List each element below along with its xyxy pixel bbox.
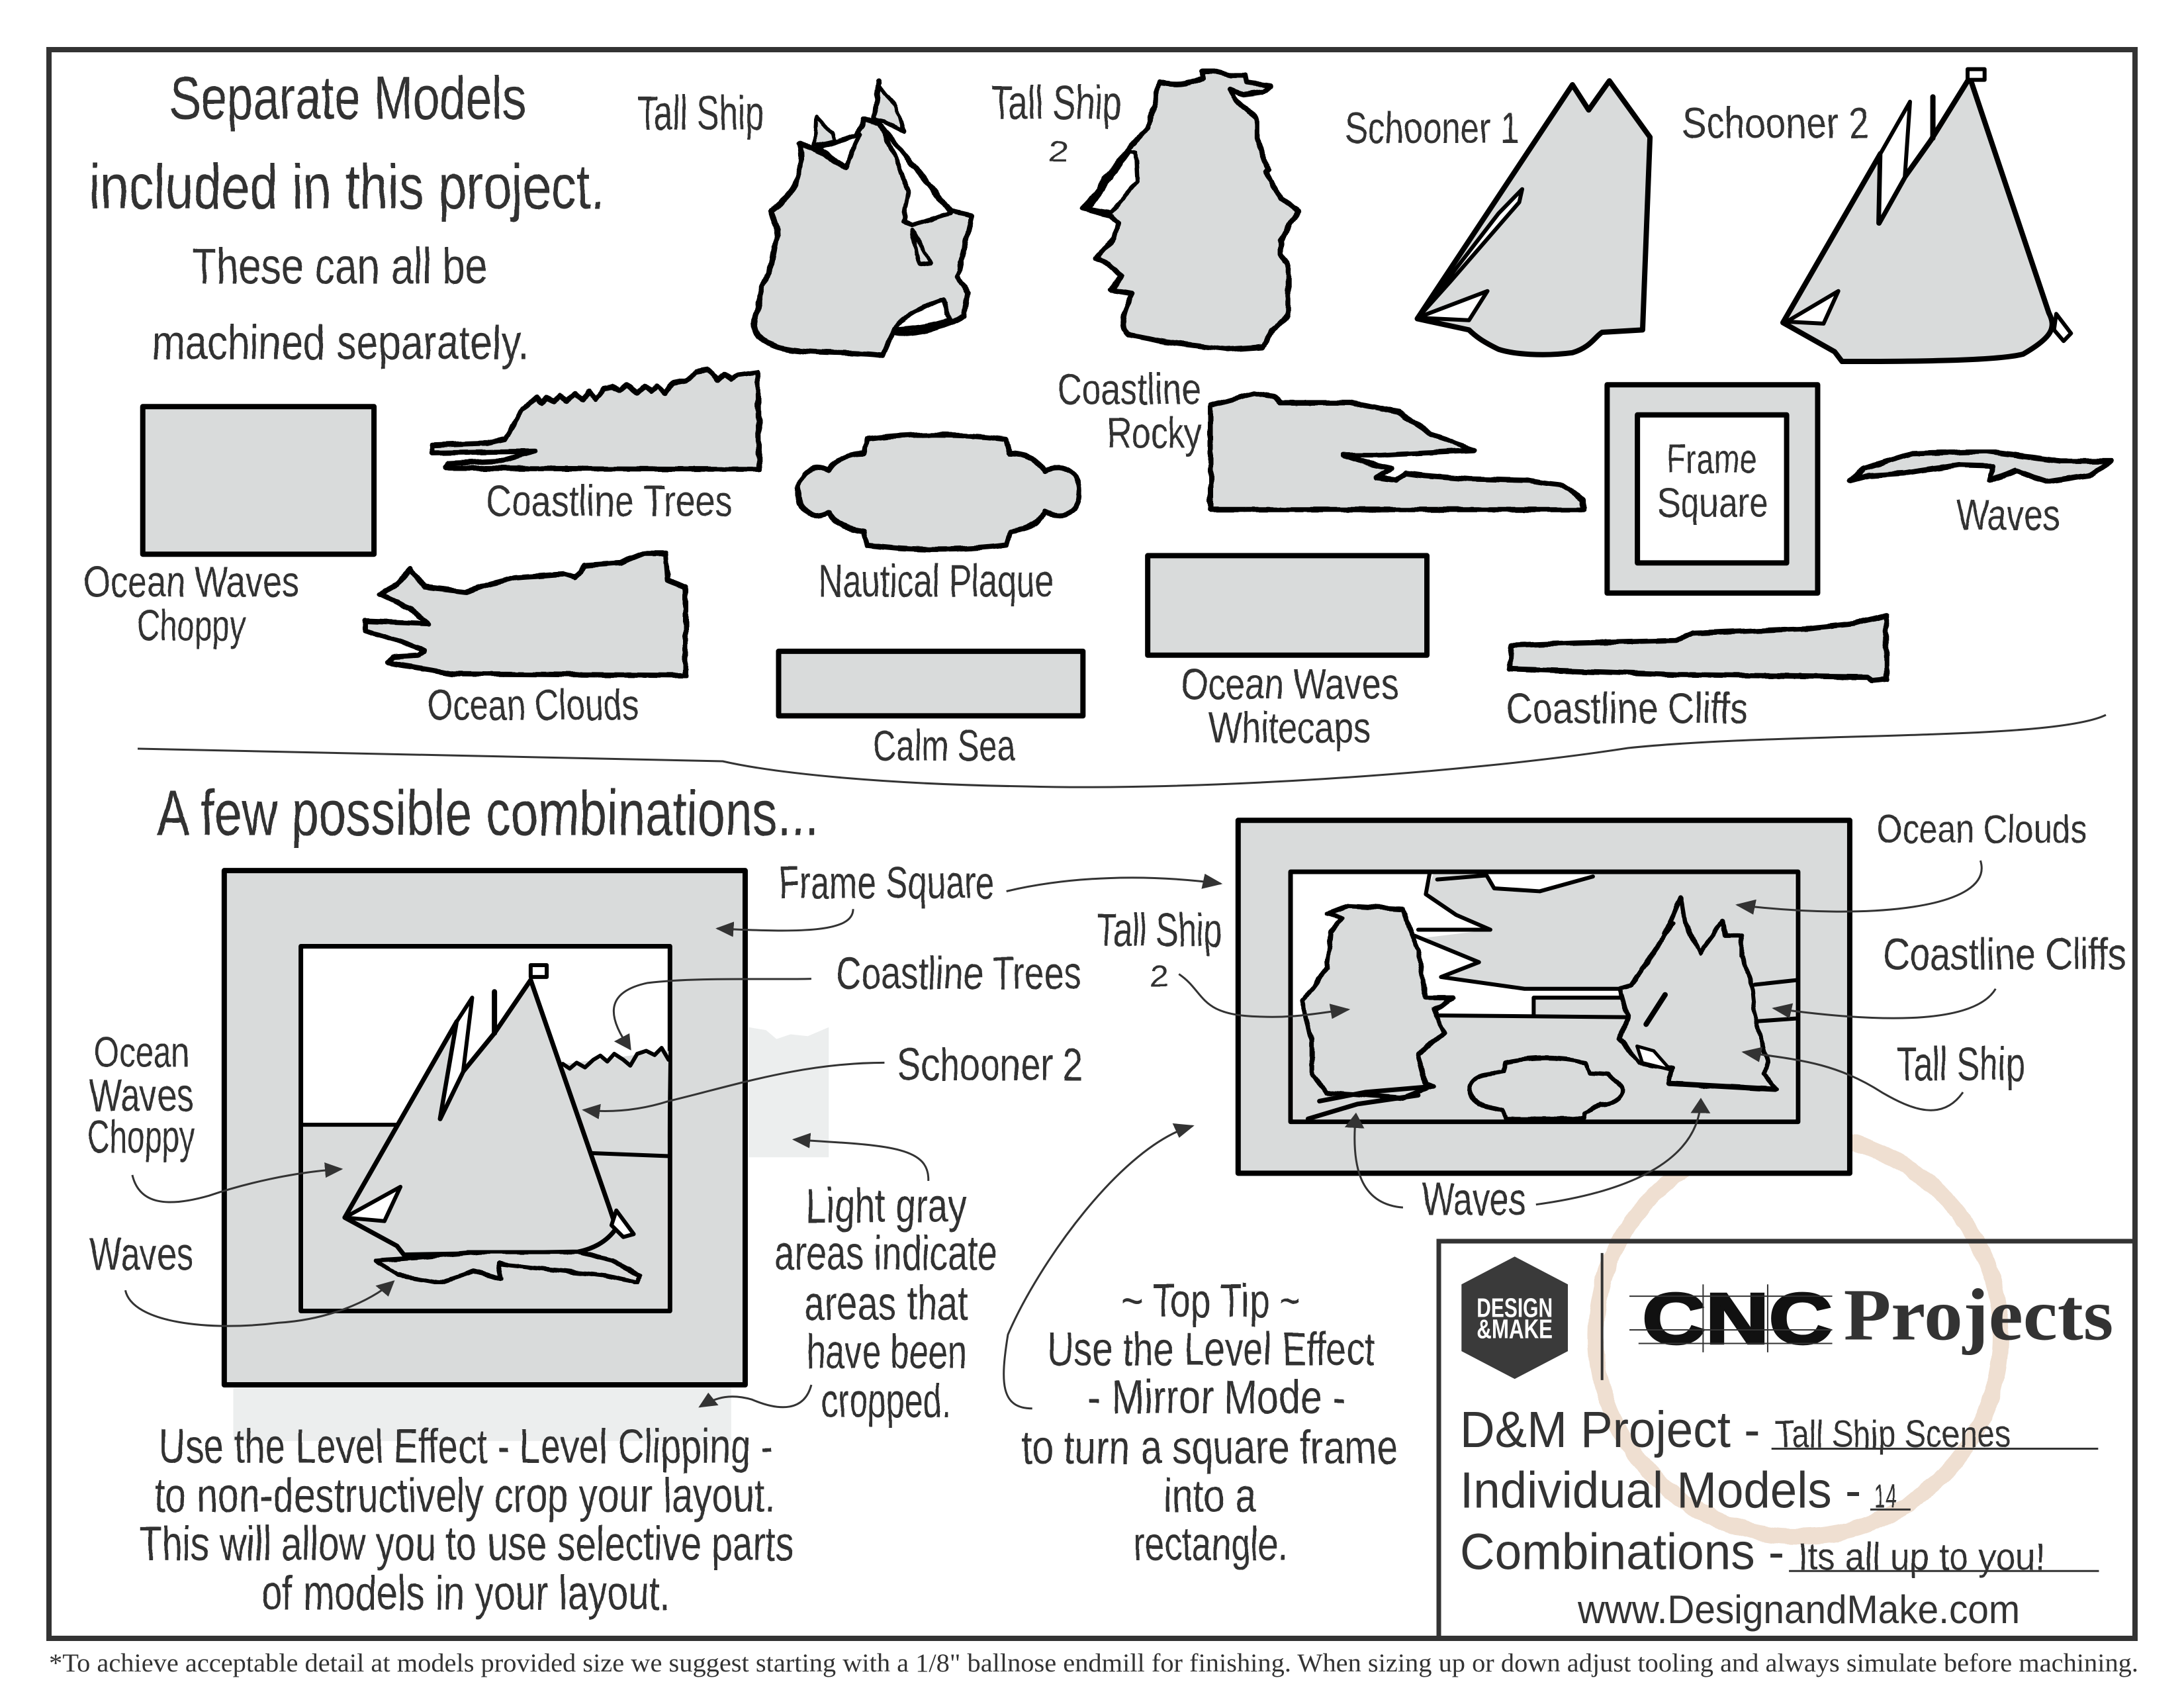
note: light gray areas (774, 1179, 997, 1428)
heading: separate models: included in this project. (89, 152, 604, 222)
model: waves (1849, 451, 2112, 482)
panel: separate models (83, 64, 2112, 770)
logo: cnc projects: CNC (1643, 1278, 1833, 1359)
label: ocean waves choppy (87, 1028, 195, 1163)
label: tall ship: Tall Ship (1897, 1039, 2025, 1091)
icon: design and make logo (1461, 1256, 1568, 1379)
arrow: frame square to rectangle (1007, 878, 1220, 891)
note: top tip (1022, 1275, 1398, 1571)
note: level clipping: Use the Level Effect - Level Clipping - (159, 1419, 773, 1473)
model: schooner 1 (1418, 81, 1650, 355)
combination: rectangle frame with ships (1238, 820, 1850, 1173)
arrow: waves right (1536, 1100, 1701, 1205)
arrow: ocean waves choppy (132, 1169, 341, 1202)
label: waves: Waves (1956, 491, 2060, 539)
model: calm sea (778, 651, 1083, 716)
label: coastline trees: Coastline Trees (836, 948, 1081, 999)
label: waves: Waves (89, 1229, 194, 1280)
label: ocean waves whitecaps (1181, 660, 1399, 753)
label: tall ship 2 (1097, 904, 1222, 992)
icon: design and make logo: &MAKE (1477, 1314, 1553, 1344)
note: top tip: into a (1163, 1470, 1257, 1523)
panel: separate models: Tall Ship (637, 87, 764, 140)
label: tall ship 2: 2 (1150, 959, 1169, 992)
note: top tip: to turn a square frame (1022, 1421, 1398, 1474)
label: schooner 1: Schooner 1 (1345, 104, 1520, 153)
model: frame square (1607, 385, 1817, 593)
label: coastline rocky: Rocky (1107, 409, 1202, 457)
label: ocean waves whitecaps: Whitecaps (1209, 704, 1371, 753)
heading: separate models: These can all be (191, 238, 488, 295)
arrow: waves left (1355, 1114, 1403, 1207)
label: tall ship 2: 2 (1048, 136, 1069, 168)
individual models count: Individual Models - (1460, 1462, 1861, 1519)
model: nautical plaque (798, 435, 1079, 549)
website: www.DesignandMake.com (1577, 1587, 2020, 1632)
note: level clipping (139, 1419, 794, 1620)
project name: D&M Project - (1460, 1401, 1760, 1458)
model: coastline trees (432, 370, 759, 469)
section divider (138, 715, 2106, 787)
combination: square frame with schooner (224, 870, 745, 1385)
note: top tip: rectangle. (1133, 1519, 1287, 1571)
coffee stain ring (1596, 1135, 2001, 1536)
label: ocean waves choppy: Ocean Waves (83, 558, 299, 606)
model: frame square: Square (1657, 480, 1768, 526)
arrow: schooner 2 (584, 1062, 884, 1111)
model: coastline cliffs (1510, 616, 1886, 681)
label: coastline cliffs: Coastline Cliffs (1506, 684, 1749, 733)
label: ocean waves choppy: Waves (89, 1070, 194, 1121)
note: level clipping: to non-destructively crop your layout. (155, 1468, 775, 1523)
footnote: *To achieve acceptable detail at models provided size we suggest starting with a 1/8" ballnose endmill for finishing. When sizing up or down adjust tooling and always simulate before machining. (49, 1649, 2138, 1677)
label: schooner 2: Schooner 2 (1682, 99, 1870, 148)
heading: separate models: Separate Models (169, 64, 525, 132)
project name: Tall Ship Scenes (1775, 1413, 2011, 1455)
note: top tip: Use the Level Effect (1048, 1323, 1375, 1376)
label: coastline rocky (1057, 365, 1202, 457)
label: nautical plaque: Nautical Plaque (818, 555, 1054, 607)
model: coastline rocky (1210, 393, 1584, 510)
model: tall ship (754, 81, 972, 355)
model: tall ship 2 (1083, 71, 1299, 350)
arrow: tall ship 2 (1179, 974, 1348, 1017)
label: coastline trees: Coastline Trees (486, 477, 733, 526)
label: frame square: Frame Square (778, 857, 995, 909)
model: ocean waves whitecaps (1148, 555, 1427, 655)
combinations: Combinations - (1460, 1523, 1784, 1580)
label: coastline rocky: Coastline (1057, 365, 1201, 414)
label: schooner 2: Schooner 2 (897, 1039, 1083, 1091)
note: light gray areas: have been (807, 1325, 967, 1379)
cropped light gray areas (234, 1027, 829, 1441)
label: waves: Waves (1422, 1173, 1526, 1225)
note: light gray areas: areas that (804, 1276, 968, 1330)
arrow: frame square (717, 909, 853, 931)
label: calm sea: Calm Sea (873, 722, 1016, 770)
note: level clipping: This will allow you to use selective parts (139, 1517, 794, 1571)
logo: cnc projects: Projects (1844, 1273, 2113, 1356)
note: light gray areas: cropped. (822, 1374, 950, 1428)
panel: separate models: Tall Ship (991, 77, 1122, 129)
individual models count: 14 (1874, 1478, 1897, 1515)
note: top tip: ~ Top Tip ~ (1122, 1275, 1300, 1327)
arrow: ocean clouds (1737, 861, 1981, 912)
label: tall ship 2 (991, 77, 1122, 168)
label: ocean waves choppy: Choppy (87, 1111, 195, 1163)
note: level clipping: of models in your layout. (261, 1566, 670, 1620)
label: ocean waves choppy: Choppy (137, 602, 246, 650)
note: light gray areas: Light gray (806, 1179, 967, 1233)
icon: design and make logo: DESIGN (1477, 1293, 1553, 1323)
combinations (1460, 1523, 2099, 1580)
label: ocean clouds: Ocean Clouds (427, 680, 639, 729)
arrow: coastline cliffs (1774, 989, 1995, 1018)
label: ocean waves whitecaps: Ocean Waves (1181, 660, 1399, 709)
arrow: top tip (1004, 1126, 1193, 1409)
model: schooner 2 (1783, 70, 2071, 361)
label: ocean waves choppy (83, 558, 299, 650)
heading: separate models: machined separately. (152, 316, 529, 370)
arrow: coastline trees (614, 979, 811, 1049)
logo: cnc projects (1629, 1273, 2113, 1359)
panel: title block (1439, 1241, 2135, 1638)
note: light gray areas: areas indicate (774, 1226, 997, 1280)
project name (1460, 1401, 2098, 1458)
arrow: waves (125, 1282, 394, 1326)
label: ocean waves choppy: Ocean (94, 1028, 189, 1076)
arrow: tall ship (1743, 1052, 1963, 1110)
arrow: light gray bottom (700, 1385, 811, 1407)
panel: combinations (87, 778, 2126, 1620)
arrow: light gray right (794, 1139, 929, 1181)
model: ocean waves choppy (143, 406, 374, 554)
combinations: Its all up to you! (1798, 1535, 2045, 1578)
model: frame square: Frame (1667, 436, 1757, 483)
note: top tip: - Mirror Mode - (1087, 1371, 1346, 1423)
heading: separate models (89, 64, 604, 370)
model: ocean clouds (365, 553, 686, 676)
label: tall ship 2: Tall Ship (1097, 904, 1222, 957)
heading: combinations: A few possible combinations... (157, 778, 818, 849)
